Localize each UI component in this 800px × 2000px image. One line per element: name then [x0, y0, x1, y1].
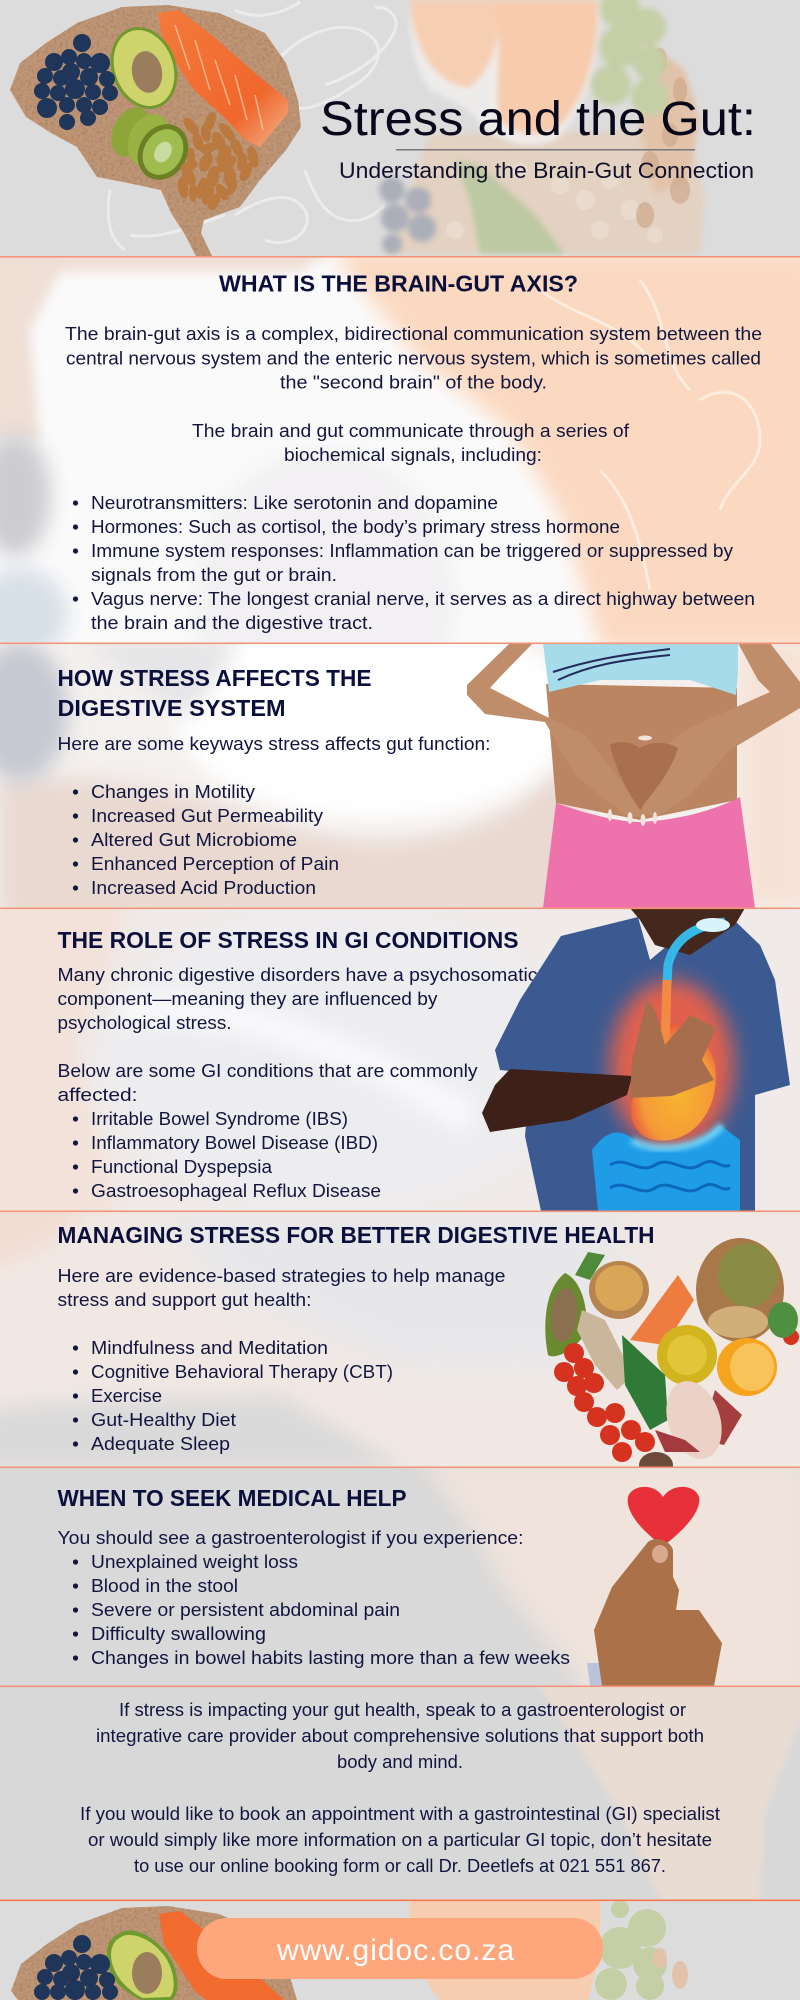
heading: HOW STRESS AFFECTS THE: [58, 665, 372, 691]
bullet list: signals: signals from the gut or brain.: [91, 565, 337, 585]
panel: the role of stress in GI conditions: [0, 900, 800, 1220]
icon: brain made of food: [10, 5, 301, 256]
bullet list: strategies: Cognitive Behavioral Therapy (CBT): [91, 1362, 393, 1382]
bullet list: conditions: Gastroesophageal Reflux Disease: [91, 1181, 381, 1201]
heading: [58, 665, 372, 721]
title: Stress and the Gut:: [320, 93, 756, 146]
bullet list: warning signs: [73, 1552, 570, 1668]
website button: [197, 1918, 603, 1979]
bullet list: conditions: [73, 1109, 381, 1201]
intro paragraph: the "second brain" of the body.: [280, 372, 547, 392]
booking paragraph: If you would like to book an appointment with a gastrointestinal (GI) specialist: [80, 1804, 720, 1824]
bullet list: effects: Increased Gut Permeability: [91, 806, 323, 826]
heading: DIGESTIVE SYSTEM: [58, 695, 286, 721]
bullet list: effects: Changes in Motility: [91, 782, 255, 802]
bullet list: signals: Neurotransmitters: Like serotonin and dopamine: [91, 493, 498, 513]
image: woman holding belly: [467, 643, 800, 908]
bullet list: strategies: Mindfulness and Meditation: [91, 1338, 328, 1358]
paragraph: [58, 965, 538, 1105]
website button: www.gidoc.co.za: [276, 1934, 514, 1967]
paragraph: Below are some GI conditions that are commonly: [58, 1061, 477, 1081]
paragraph: affected:: [58, 1085, 138, 1105]
intro paragraph: central nervous system and the enteric nervous system, which is sometimes called: [66, 348, 761, 368]
heading: MANAGING STRESS FOR BETTER DIGESTIVE HEALTH: [58, 1222, 654, 1248]
panel: managing stress: [0, 1200, 800, 1478]
bullet list: signals: the brain and the digestive tract.: [91, 613, 373, 633]
booking paragraph: [80, 1804, 720, 1876]
bullet list: strategies: [73, 1338, 393, 1454]
bullet list: signals: Immune system responses: Inflammation can be triggered or suppressed by: [91, 541, 733, 561]
bullet list: signals: [73, 493, 755, 633]
second paragraph: [192, 421, 630, 465]
bullet list: signals: Vagus nerve: The longest cranial nerve, it serves as a direct highway between: [91, 589, 755, 609]
paragraph: Many chronic digestive disorders have a psychosomatic: [58, 965, 538, 985]
icon: brain made of food (cropped): [11, 1906, 297, 2000]
paragraph: psychological stress.: [58, 1013, 232, 1033]
booking paragraph: to use our online booking form or call Dr. Deetlefs at 021 551 867.: [134, 1856, 666, 1876]
intro text: You should see a gastroenterologist if you experience:: [58, 1528, 524, 1548]
closing paragraph: integrative care provider about comprehensive solutions that support both: [96, 1726, 704, 1746]
section 4 background: [0, 1200, 800, 1470]
paragraph: component—meaning they are influenced by: [58, 989, 438, 1009]
section 2 background: [0, 644, 800, 908]
closing paragraph: If stress is impacting your gut health, speak to a gastroenterologist or: [119, 1700, 686, 1720]
bullet list: warning signs: Unexplained weight loss: [91, 1552, 298, 1572]
panel: when to seek medical help: [58, 1468, 800, 1686]
panel: header: [0, 0, 800, 256]
bullet list: warning signs: Severe or persistent abdominal pain: [91, 1600, 400, 1620]
intro paragraph: The brain-gut axis is a complex, bidirectional communication system between the: [65, 324, 762, 344]
closing paragraph: body and mind.: [337, 1752, 463, 1772]
panel: what is the brain-gut axis: [0, 258, 800, 642]
title underline: [396, 149, 695, 150]
bullet list: conditions: Inflammatory Bowel Disease (IBD): [91, 1133, 378, 1153]
panel: how stress affects the digestive system: [0, 644, 800, 908]
paragraph: Here are evidence-based strategies to help manage: [58, 1266, 506, 1286]
paragraph: [58, 1266, 506, 1310]
panel: call to action: [82, 1687, 800, 1900]
panel: footer: [0, 1900, 800, 2000]
image: hand holding red heart: [587, 1487, 722, 1686]
bullet list: effects: Increased Acid Production: [91, 878, 316, 898]
heading: WHAT IS THE BRAIN-GUT AXIS?: [219, 270, 578, 296]
bullet list: warning signs: Difficulty swallowing: [91, 1624, 266, 1644]
heading: THE ROLE OF STRESS IN GI CONDITIONS: [58, 927, 518, 953]
intro text: Here are some keyways stress affects gut function:: [58, 734, 490, 754]
bullet list: effects: [73, 782, 339, 898]
bullet list: strategies: Adequate Sleep: [91, 1434, 230, 1454]
bullet list: conditions: Functional Dyspepsia: [91, 1157, 273, 1177]
bullet list: strategies: Gut-Healthy Diet: [91, 1410, 236, 1430]
section 3 background: [0, 900, 800, 1220]
header background photo: [106, 0, 706, 256]
section 6 background: [542, 1687, 800, 1900]
section 1 background: [0, 258, 800, 642]
second paragraph: biochemical signals, including:: [284, 445, 542, 465]
subtitle: Understanding the Brain-Gut Connection: [339, 158, 754, 183]
heading: WHEN TO SEEK MEDICAL HELP: [58, 1485, 406, 1511]
section 5 background: [428, 1468, 800, 1686]
second paragraph: The brain and gut communicate through a series of: [192, 421, 630, 441]
bullet list: conditions: Irritable Bowel Syndrome (IBS): [91, 1109, 348, 1129]
bullet list: warning signs: Blood in the stool: [91, 1576, 238, 1596]
image: man with glowing digestive tract: [482, 908, 790, 1211]
image: heart of healthy foods: [545, 1238, 799, 1478]
footer background photo: [0, 1900, 800, 2000]
booking paragraph: or would simply like more information on a particular GI topic, don’t hesitate: [88, 1830, 712, 1850]
bullet list: strategies: Exercise: [91, 1386, 162, 1406]
paragraph: stress and support gut health:: [58, 1290, 312, 1310]
bullet list: warning signs: Changes in bowel habits lasting more than a few weeks: [91, 1648, 570, 1668]
intro paragraph: [65, 324, 762, 392]
closing paragraph: [96, 1700, 704, 1772]
bullet list: signals: Hormones: Such as cortisol, the body’s primary stress hormone: [91, 517, 620, 537]
bullet list: effects: Altered Gut Microbiome: [91, 830, 297, 850]
bullet list: effects: Enhanced Perception of Pain: [91, 854, 339, 874]
